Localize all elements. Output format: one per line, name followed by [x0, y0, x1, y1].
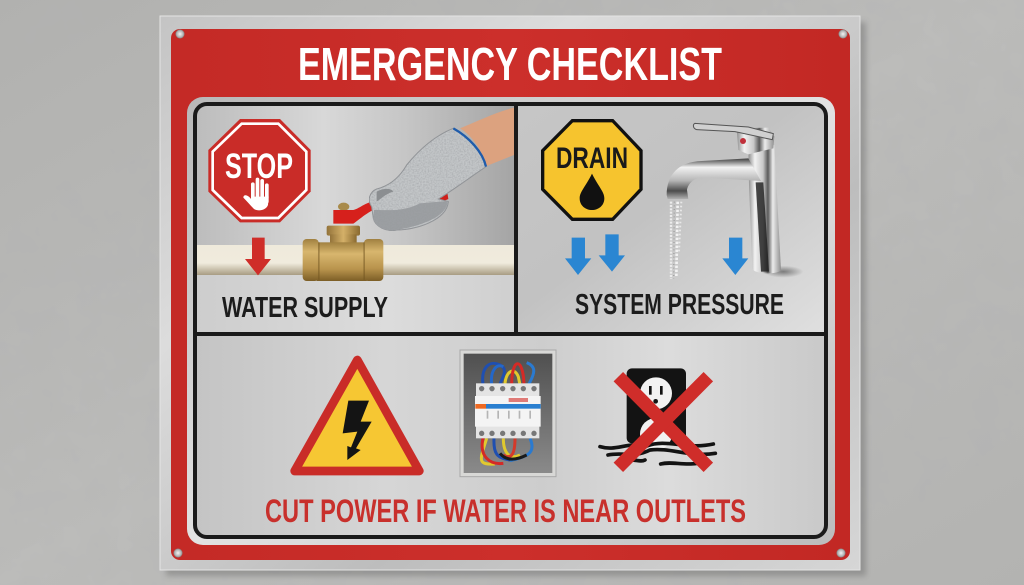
- panel: power: [195, 335, 827, 539]
- brass valve: [303, 203, 383, 281]
- silver frame: [187, 97, 835, 545]
- breaker module: [476, 383, 539, 438]
- prohibition cross: [618, 377, 708, 467]
- icon: stop sign: [208, 119, 311, 222]
- rivets: [174, 30, 848, 558]
- red sign background: [171, 29, 850, 560]
- icon: drop: [580, 174, 604, 210]
- arrow: red down: [245, 238, 271, 275]
- wires: [481, 363, 534, 464]
- arm: [460, 108, 514, 167]
- label: stop: STOP: [225, 147, 293, 186]
- panel frame and dividers: [195, 104, 826, 537]
- water waves: [600, 443, 715, 464]
- panel: system pressure: [517, 104, 827, 335]
- faucet shadow: [766, 266, 802, 277]
- label: system pressure: SYSTEM PRESSURE: [575, 289, 784, 321]
- label: drain: DRAIN: [556, 142, 628, 175]
- icon: breaker box: [460, 350, 556, 477]
- icon: electrical warning triangle: [295, 360, 419, 471]
- faucet spray: [671, 202, 681, 279]
- arrows: blue down: [565, 234, 748, 275]
- icon: glove: [369, 128, 486, 231]
- label: water supply: WATER SUPPLY: [222, 292, 388, 324]
- title: EMERGENCY CHECKLIST: [298, 38, 722, 90]
- label: cut power warning: CUT POWER IF WATER IS NEAR OUTLETS: [265, 493, 746, 529]
- icon: lightning bolt: [343, 401, 372, 460]
- icon: drain sign: [541, 119, 643, 221]
- icon: outlet in water: [600, 368, 715, 467]
- icon: faucet: [667, 123, 781, 273]
- metal sign plate: [160, 16, 866, 576]
- icon: hand: [243, 178, 269, 210]
- water supply illustration: [195, 108, 515, 281]
- valve handle: [333, 202, 372, 224]
- pipe: [195, 245, 515, 275]
- panel: water supply: [195, 104, 517, 335]
